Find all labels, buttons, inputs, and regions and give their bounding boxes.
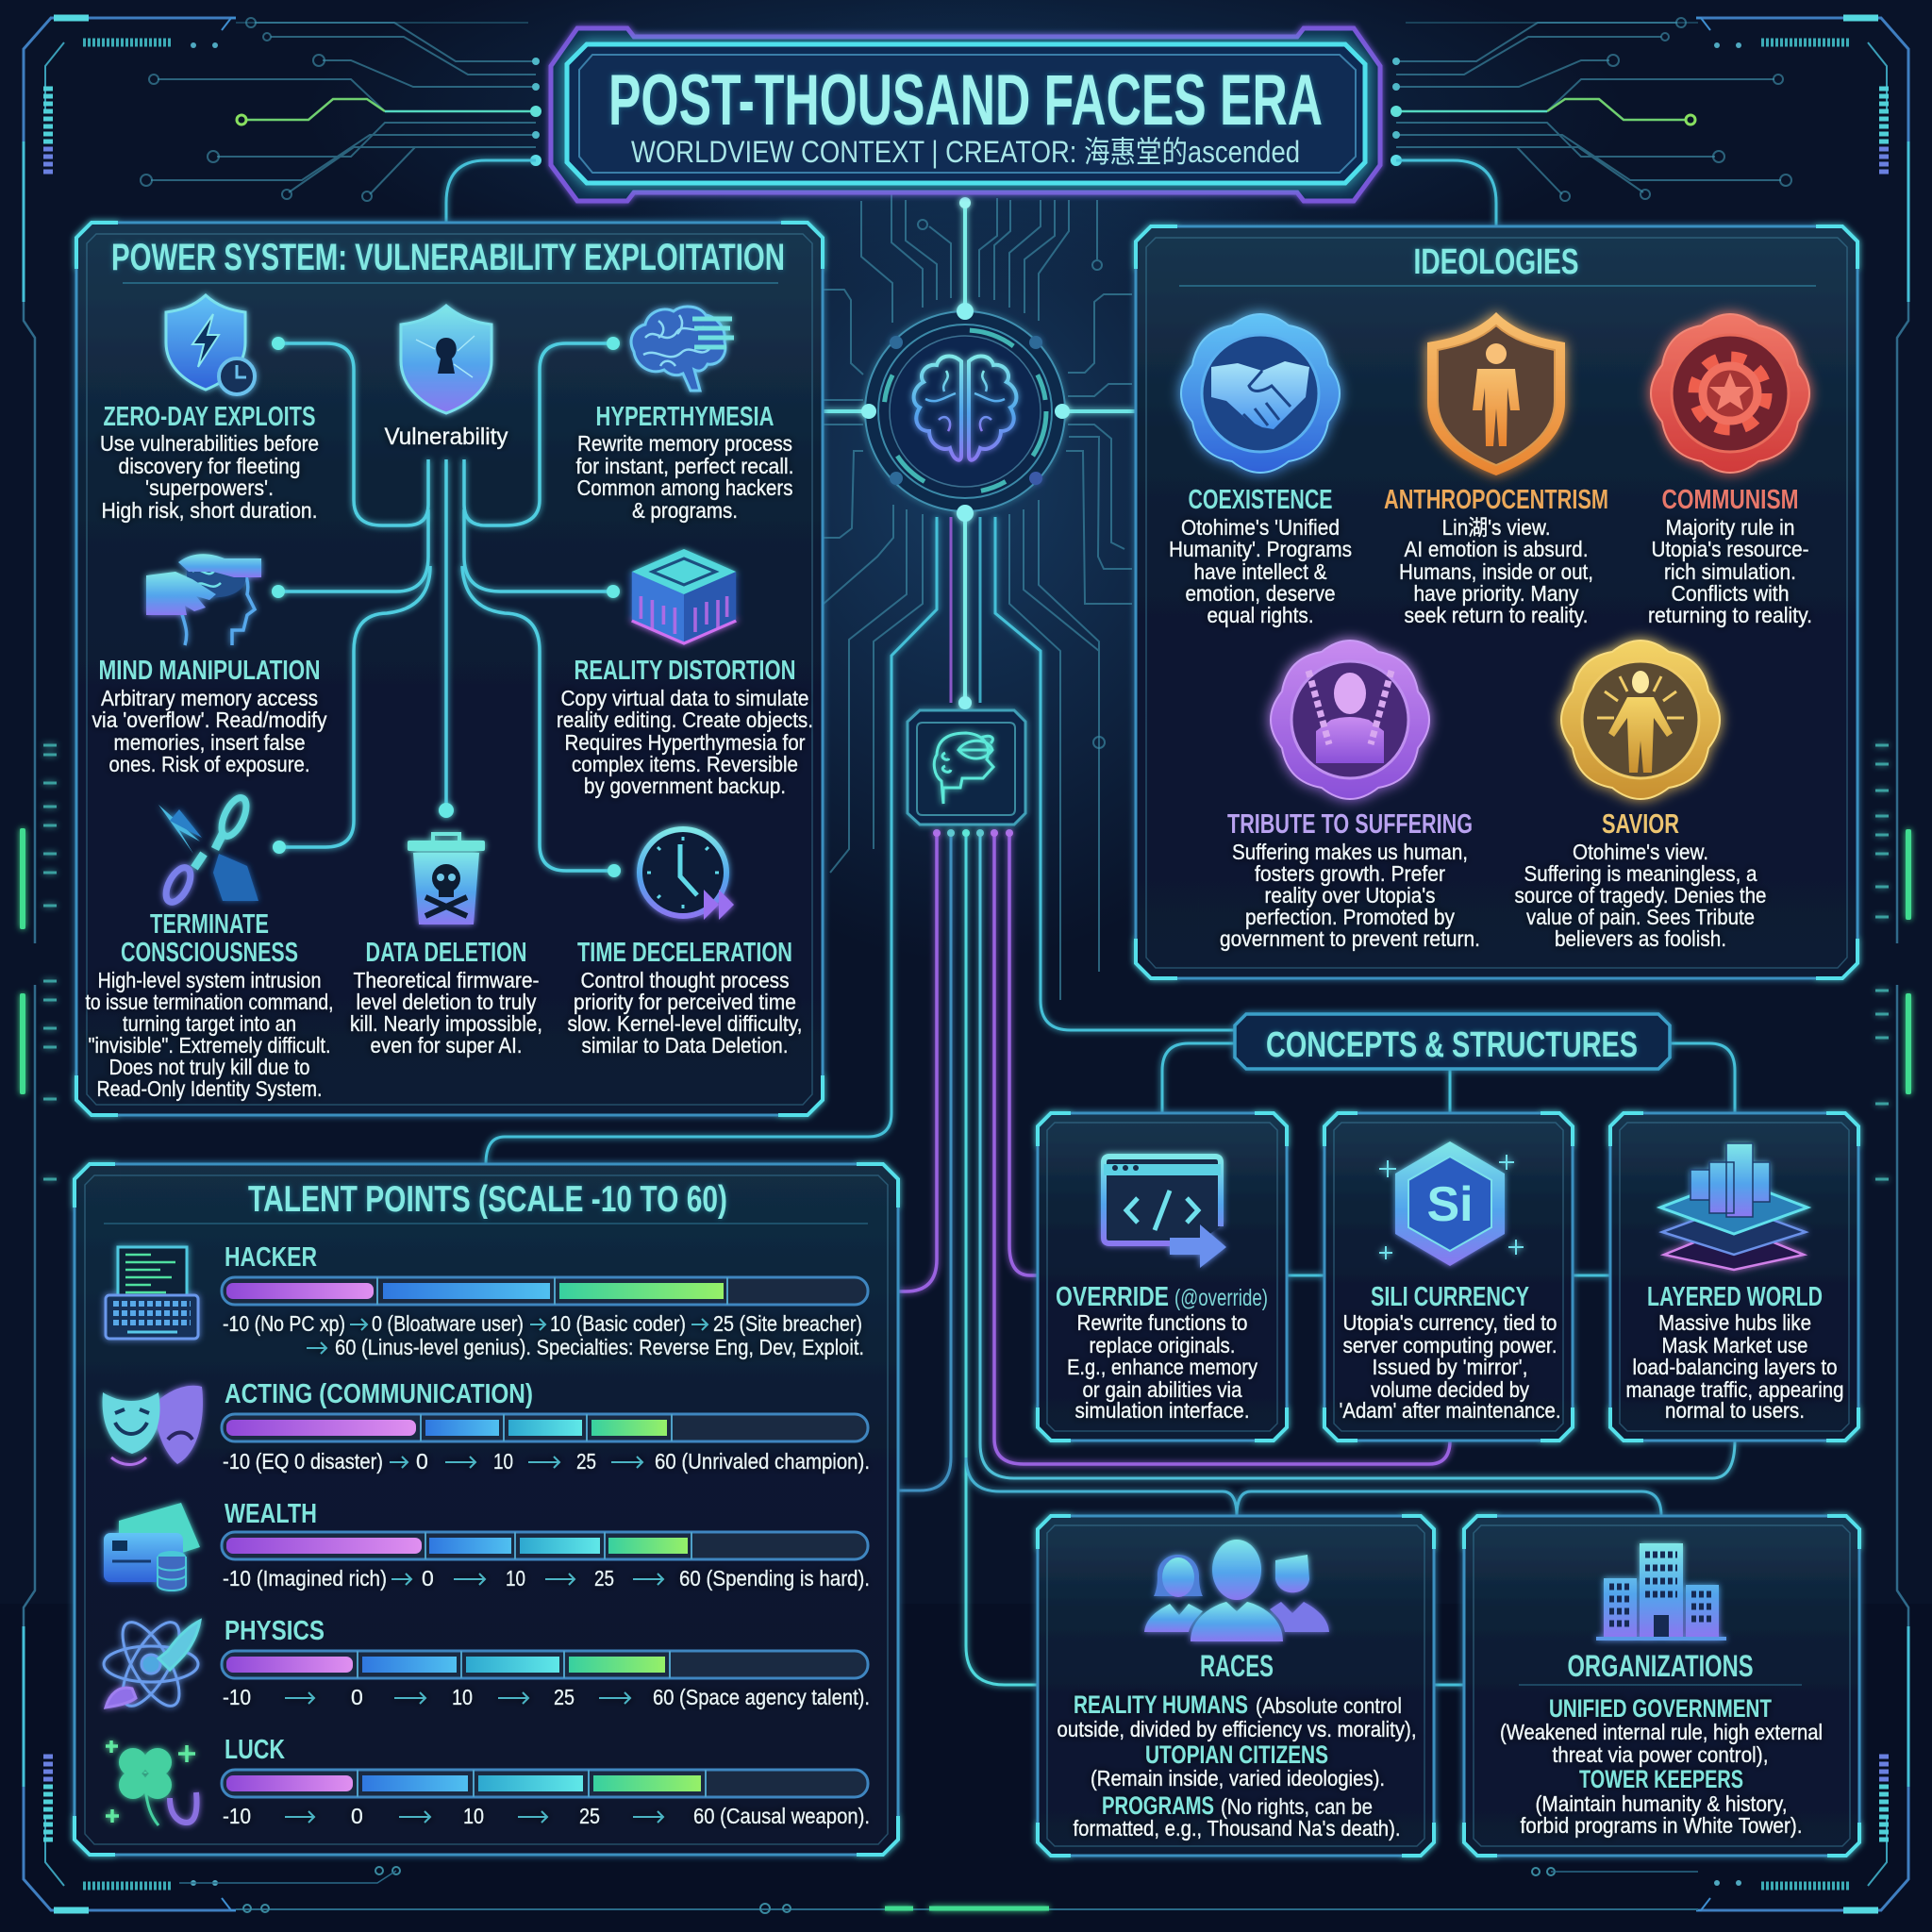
title banner (551, 28, 1380, 201)
item description: have intellect & (1194, 559, 1326, 584)
title frame: purple outer (551, 28, 1380, 201)
item: zero-day exploits (100, 402, 319, 523)
item description: Utopia's resource- (1651, 537, 1809, 561)
row: acting (222, 1379, 870, 1474)
icon: communism badge (1651, 314, 1809, 473)
row label: WEALTH (225, 1499, 317, 1529)
scale text: 10 (506, 1566, 525, 1591)
row label: PHYSICS (225, 1616, 325, 1646)
scale text (223, 1566, 870, 1591)
icon: broken chain (158, 794, 258, 906)
item description: seek return to reality. (1404, 603, 1589, 627)
heading frame (1235, 1014, 1670, 1069)
item description: manage traffic, appearing (1626, 1377, 1843, 1402)
item description: outside, divided by efficiency vs. morality), (1057, 1717, 1417, 1741)
icon: wealth cards (104, 1503, 200, 1591)
icon: code window (1104, 1157, 1226, 1268)
item description: 'superpowers'. (145, 475, 274, 500)
icon: hacker keyboard (106, 1247, 198, 1339)
row label: LUCK (225, 1735, 285, 1765)
item: savior (1515, 809, 1766, 951)
item description: (Maintain humanity & history, (1536, 1791, 1787, 1816)
heading: POWER SYSTEM: VULNERABILITY EXPLOITATION (111, 237, 785, 278)
progress bar (222, 1414, 868, 1441)
item heading: LAYERED WORLD (1647, 1282, 1823, 1312)
item description: normal to users. (1665, 1398, 1805, 1423)
item description (1515, 840, 1766, 951)
panel: layered world (1610, 1113, 1858, 1441)
icon: tribute badge (1271, 641, 1429, 799)
scale text: 60 (Linus-level genius). Specialties: Reverse Eng, Dev, Exploit. (335, 1335, 864, 1359)
heading: POST-THOUSAND FACES ERA (608, 60, 1323, 141)
icon: silicon hex coin: Si (1426, 1177, 1474, 1232)
icon: silicon hex coin (1379, 1141, 1524, 1266)
item description: to issue termination command, (85, 990, 334, 1014)
item description: Suffering makes us human, (1232, 840, 1468, 864)
scale text: -10 (223, 1804, 251, 1828)
item description: Lin湖's view. (1441, 515, 1551, 540)
item description (1648, 515, 1812, 627)
item heading: OVERRIDE (1056, 1282, 1169, 1312)
item heading: MIND MANIPULATION (98, 656, 321, 686)
item description: (Weakened internal rule, high external (1500, 1720, 1823, 1744)
icon: anthropocentrism shield (1427, 312, 1565, 475)
panel: talent points (75, 1164, 898, 1855)
item heading: REALITY DISTORTION (574, 656, 796, 686)
icon: vulnerability shield (401, 306, 491, 413)
item description: even for super AI. (370, 1033, 523, 1058)
central hub (861, 303, 1070, 522)
label: vulnerability: Vulnerability (385, 424, 508, 450)
item description: reality editing. Create objects. (557, 708, 813, 732)
item description: slow. Kernel-level difficulty, (568, 1011, 802, 1036)
heading rule (104, 1223, 868, 1224)
icon: buildings (1596, 1543, 1726, 1639)
scale text: 25 (576, 1449, 596, 1474)
item description: equal rights. (1208, 603, 1313, 627)
item description: Humanity'. Programs (1169, 537, 1352, 561)
item heading: ZERO-DAY EXPLOITS (104, 402, 315, 432)
item description: (Remain inside, varied ideologies). (1091, 1766, 1385, 1790)
panel frame (1038, 1113, 1287, 1441)
panel: races (1038, 1516, 1434, 1856)
item description: returning to reality. (1648, 603, 1812, 627)
heading rule (1519, 1684, 1802, 1686)
item description (1626, 1310, 1843, 1423)
item description: volume decided by (1371, 1377, 1529, 1402)
item description: discovery for fleeting (119, 454, 300, 478)
row: wealth (222, 1499, 870, 1591)
icon: brain with data (631, 307, 734, 391)
item description: reality over Utopia's (1264, 883, 1436, 908)
scale text: -10 (Imagined rich) (223, 1566, 387, 1591)
icon: layered city (1660, 1143, 1807, 1270)
item description: "invisible". Extremely difficult. (89, 1033, 330, 1058)
tree connectors (272, 337, 621, 877)
item description: Conflicts with (1672, 581, 1789, 606)
item description: turning target into an (123, 1011, 296, 1036)
connector lines (446, 160, 1735, 1685)
scale text (223, 1685, 870, 1709)
panel: override (1038, 1113, 1287, 1441)
hub rings (861, 303, 1070, 522)
icon: mind manipulation (146, 554, 261, 645)
item description: Issued by 'mirror', (1372, 1355, 1528, 1379)
item heading: (@override) (1174, 1285, 1268, 1311)
item description: Does not truly kill due to (109, 1055, 309, 1079)
item description: TOWER KEEPERS (1579, 1765, 1743, 1793)
panel: organizations (1464, 1516, 1859, 1856)
scale text: -10 (No PC xp) (223, 1311, 345, 1336)
progress bar (222, 1532, 868, 1559)
circuit traces: title right (1391, 18, 1791, 201)
item description (85, 968, 334, 1101)
item description: or gain abilities via (1083, 1377, 1242, 1402)
icon: trash with skull (408, 834, 485, 924)
item description: value of pain. Sees Tribute (1526, 905, 1755, 929)
item description: fosters growth. Prefer (1255, 861, 1445, 886)
scale text: 60 (Causal weapon). (693, 1804, 870, 1828)
panel: concepts heading (1235, 1014, 1670, 1069)
panel frame (1136, 226, 1857, 978)
item description (557, 686, 813, 798)
icon: people group (1144, 1540, 1329, 1641)
heading: TALENT POINTS (SCALE -10 TO 60) (248, 1179, 727, 1220)
icon: clock (640, 829, 734, 920)
item description: Rewrite functions to (1077, 1310, 1247, 1335)
item description: (Absolute control (1256, 1693, 1402, 1718)
scale text: 10 (493, 1449, 513, 1474)
icon: savior badge (1561, 641, 1720, 799)
panel: sili currency (1324, 1113, 1573, 1441)
heading: IDEOLOGIES (1413, 242, 1579, 282)
item description: (No rights, can be (1221, 1794, 1373, 1819)
scale text: 25 (Site breacher) (713, 1311, 862, 1336)
scale text: 10 (463, 1804, 484, 1828)
scale text: 0 (351, 1685, 363, 1709)
item description: High-level system intrusion (98, 968, 321, 992)
item heading: TIME DECELERATION (577, 938, 792, 968)
heading text: CONCEPTS & STRUCTURES (1266, 1025, 1638, 1065)
chip (908, 696, 1025, 824)
item heading: DATA DELETION (366, 938, 526, 968)
item description (1500, 1694, 1823, 1838)
scale text: 0 (416, 1449, 428, 1474)
item description: by government backup. (584, 774, 786, 798)
item description: Majority rule in (1666, 515, 1794, 540)
item description: complex items. Reversible (572, 752, 798, 776)
item heading: SILI CURRENCY (1371, 1282, 1529, 1312)
scale text: 10 (452, 1685, 473, 1709)
item description: & programs. (632, 498, 738, 523)
icon: head with visor (934, 733, 993, 804)
item heading: COEXISTENCE (1189, 485, 1332, 515)
item: data deletion (350, 938, 542, 1058)
item description (1057, 1690, 1417, 1840)
row label: ACTING (COMMUNICATION) (225, 1379, 533, 1409)
panel frame (1324, 1113, 1573, 1441)
item description: perfection. Promoted by (1245, 905, 1455, 929)
item description: Otohime's 'Unified (1181, 515, 1340, 540)
item description: E.g., enhance memory (1067, 1355, 1257, 1379)
item: tribute to suffering (1220, 809, 1480, 951)
scale text: 0 (422, 1566, 434, 1591)
item description: UNIFIED GOVERNMENT (1549, 1694, 1772, 1723)
item description: Suffering is meaningless, a (1524, 861, 1757, 886)
item description: source of tragedy. Denies the (1515, 883, 1766, 908)
item heading: TRIBUTE TO SUFFERING (1227, 809, 1473, 840)
item description: similar to Data Deletion. (581, 1033, 789, 1058)
item description (100, 431, 319, 523)
item: anthropocentrism (1384, 485, 1608, 627)
item description: Control thought process (581, 968, 789, 992)
icon: brain (914, 356, 1016, 460)
item description: simulation interface. (1075, 1398, 1249, 1423)
scale text: -10 (223, 1685, 251, 1709)
scale text: 60 (Spending is hard). (679, 1566, 870, 1591)
item description: REALITY HUMANS (1074, 1690, 1248, 1719)
item description (1067, 1310, 1257, 1423)
scale text: -10 (EQ 0 disaster) (223, 1449, 383, 1474)
panel frame (1038, 1516, 1434, 1856)
item description: for instant, perfect recall. (575, 454, 794, 478)
icon: zero-day shield (166, 295, 255, 394)
item description: Massive hubs like (1658, 1310, 1811, 1335)
heading rule (123, 282, 778, 284)
scale text (223, 1311, 864, 1359)
circuit traces: title left (141, 18, 541, 201)
item description (350, 968, 542, 1058)
item description: memories, insert false (113, 730, 306, 755)
item description: Arbitrary memory access (101, 686, 318, 710)
item: reality distortion (557, 656, 813, 798)
item: terminate consciousness (85, 909, 334, 1101)
row: luck (222, 1735, 870, 1828)
item description: forbid programs in White Tower). (1521, 1813, 1802, 1838)
item description: 'Adam' after maintenance. (1340, 1398, 1560, 1423)
scale text: 10 (Basic coder) (550, 1311, 686, 1336)
scale text: 25 (594, 1566, 614, 1591)
row label: HACKER (225, 1242, 317, 1273)
item description: level deletion to truly (357, 990, 537, 1014)
icon: glitched cube (632, 549, 736, 643)
item description: Utopia's currency, tied to (1343, 1310, 1557, 1335)
item heading: RACES (1200, 1649, 1274, 1683)
item description: Copy virtual data to simulate (560, 686, 809, 710)
item heading: COMMUNISM (1662, 485, 1798, 515)
item description: load-balancing layers to (1632, 1355, 1838, 1379)
item description: High risk, short duration. (102, 498, 317, 523)
item heading line 2: CONSCIOUSNESS (121, 938, 298, 968)
item description (1169, 515, 1352, 627)
progress bar (222, 1277, 868, 1305)
item heading: SAVIOR (1602, 809, 1679, 840)
item: communism (1648, 485, 1812, 627)
item description: Common among hackers (577, 475, 792, 500)
panel: ideologies (1136, 226, 1857, 978)
item description (575, 431, 794, 523)
item description: PROGRAMS (1102, 1791, 1214, 1820)
panel frame (1610, 1113, 1858, 1441)
chip frame (908, 696, 1025, 824)
scale text: 0 (Bloatware user) (372, 1311, 524, 1336)
item description: believers as foolish. (1555, 926, 1726, 951)
icon: atom and rocket (104, 1614, 200, 1714)
item description: Requires Hyperthymesia for (564, 730, 806, 755)
subtitle: WORLDVIEW CONTEXT | CREATOR: 海惠堂的ascended (631, 135, 1300, 169)
title frame: cyan (567, 44, 1365, 183)
item description: threat via power control), (1553, 1742, 1768, 1767)
row: physics (222, 1616, 870, 1709)
progress bar (222, 1770, 868, 1797)
item description: Read-Only Identity System. (96, 1076, 323, 1101)
item heading: ANTHROPOCENTRISM (1384, 485, 1608, 515)
scale text (223, 1449, 870, 1474)
item description: formatted, e.g., Thousand Na's death). (1074, 1816, 1400, 1840)
item description: kill. Nearly impossible, (350, 1011, 542, 1036)
side data strips (20, 745, 1911, 1908)
item description (92, 686, 327, 776)
panel frame (76, 223, 823, 1115)
item heading: ORGANIZATIONS (1568, 1649, 1753, 1683)
scale text: 0 (351, 1804, 363, 1828)
panel: power system (76, 223, 823, 1115)
row: hacker (222, 1242, 868, 1359)
item description: priority for perceived time (574, 990, 796, 1014)
progress bar (222, 1651, 868, 1678)
panel frame (1464, 1516, 1859, 1856)
title frame: inner (579, 55, 1356, 173)
item description: UTOPIAN CITIZENS (1145, 1740, 1328, 1769)
scale text: 60 (Space agency talent). (653, 1685, 870, 1709)
panel frame (75, 1164, 898, 1855)
item description: emotion, deserve (1185, 581, 1336, 606)
item description: Rewrite memory process (577, 431, 792, 456)
item description: Use vulnerabilities before (100, 431, 319, 456)
icon: clover and horseshoe (106, 1740, 197, 1825)
heading rule (1179, 285, 1816, 287)
item: mind manipulation (92, 656, 327, 776)
item: coexistence (1169, 485, 1352, 627)
item description (568, 968, 802, 1058)
item description: Otohime's view. (1573, 840, 1708, 864)
item description: government to prevent return. (1220, 926, 1480, 951)
icon: theatre masks (103, 1386, 203, 1464)
circuit traces: centre (824, 193, 1132, 1000)
item description: rich simulation. (1664, 559, 1796, 584)
item heading: HYPERTHYMESIA (596, 402, 774, 432)
item description: Theoretical firmware- (353, 968, 540, 992)
item description (1399, 515, 1593, 627)
item description: Mask Market use (1662, 1333, 1807, 1357)
item description (1220, 840, 1480, 951)
item: hyperthymesia (575, 402, 794, 523)
item description: server computing power. (1343, 1333, 1557, 1357)
scale text: 60 (Unrivaled champion). (655, 1449, 870, 1474)
item description: replace originals. (1089, 1333, 1236, 1357)
item heading: TERMINATE (150, 909, 269, 940)
item description: Humans, inside or out, (1399, 559, 1593, 584)
icon: coexistence badge (1181, 314, 1340, 473)
item description (1340, 1310, 1560, 1423)
scale text: 25 (579, 1804, 600, 1828)
scale text: 25 (554, 1685, 575, 1709)
item description: via 'overflow'. Read/modify (92, 708, 327, 732)
item heading (1056, 1282, 1268, 1312)
item description: AI emotion is absurd. (1404, 537, 1589, 561)
scale text (223, 1804, 870, 1828)
item description: have priority. Many (1413, 581, 1579, 606)
item: time deceleration (568, 938, 802, 1058)
item description: ones. Risk of exposure. (109, 752, 309, 776)
